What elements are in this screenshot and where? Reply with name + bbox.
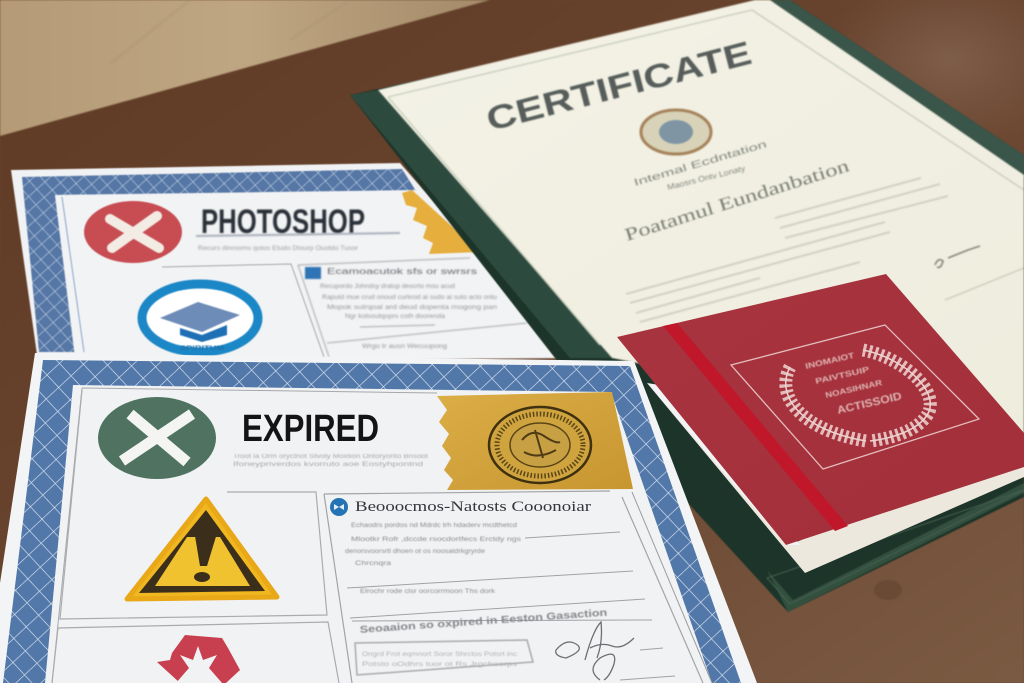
front sheet: Expired certificate (0, 353, 757, 683)
inner panel (45, 385, 712, 683)
info body: Chrcnqra (355, 560, 392, 567)
info body: Elrochr rode clsr oorcorrmoon Ths dork (360, 588, 496, 595)
back sheet: Photoshop certificate (11, 163, 570, 362)
green x icon (98, 397, 216, 479)
booklet text: PAIVTSUIP (814, 365, 871, 386)
small lines (233, 454, 428, 468)
signature (556, 622, 634, 680)
info body: Mlootkr Rofr ,dccde rsocdortfecs Erctdy ngs (351, 536, 522, 543)
certificate subtitle (633, 139, 768, 192)
booklet text: ACTISSOID (836, 390, 903, 417)
certificate title: CERTIFICATE (482, 34, 755, 138)
expired heading: EXPIRED (242, 408, 379, 450)
warning triangle icon (127, 499, 277, 599)
certificate signature (935, 246, 1024, 300)
stamp box: Potsto oOdhrs tuor ot Rs Jrgchoorps (362, 662, 517, 668)
certificate name line: Poatamul Eundanbation (622, 155, 851, 245)
gold ribbon (402, 190, 480, 254)
info body (345, 522, 522, 595)
info box: Mopok sutrqoal ard deud dopenta rnogong pan (327, 305, 497, 311)
warning cell (60, 390, 327, 619)
info box: Ngr kotsoutqoprs coth doorenda (345, 314, 446, 320)
info bold line: Seoaaion so oxpired in Eeston Gasaction (359, 608, 608, 636)
booklet text (804, 351, 903, 417)
cell rules (162, 264, 324, 357)
certificate subtitle: Intemal Ecdntation (633, 139, 768, 189)
recycle icon (157, 635, 240, 683)
red x icon (84, 201, 182, 263)
red booklet (617, 274, 1024, 545)
gold seal band (437, 392, 633, 490)
heading rule and small text (196, 233, 400, 252)
certificate folder (350, 0, 1024, 612)
photoshop heading: PHOTOSHOP (201, 203, 365, 241)
certificate body lines (626, 178, 948, 322)
folder textured edge (767, 483, 1024, 612)
certificate paper (378, 0, 1024, 440)
info heading: Beooocmos-Natosts Cooonoiar (355, 499, 591, 515)
graduation icon (142, 284, 258, 352)
info box: Recupordo Johndsy dratup deocrto mou acud (320, 284, 455, 290)
heading rule and small text: Recurs dinrooms qotos Etudo Dtourp Ouotdo Tusor (198, 245, 359, 252)
info box: Wrgo tr ausn Wecuupong (362, 344, 447, 350)
info box: Ecamoacutok sfs or swrsrs (327, 267, 477, 276)
small lines: Ifoneypriverdos kvorruto aoe Eostyhpontnd (233, 462, 423, 468)
booklet ribbon (663, 323, 848, 531)
info box (298, 258, 527, 357)
booklet emblem frame (731, 325, 979, 469)
info body: denorsvoorsrtl dhoen ot os noosatdrkgryrde (345, 548, 485, 555)
info box (324, 491, 703, 683)
bottom cell (52, 622, 339, 683)
booklet wreath (786, 350, 930, 441)
info box: Raputd mue crud onoud curkrod ai sudo ai suto acto ontu (322, 295, 497, 301)
graduation icon: SPIRITUM (180, 346, 224, 352)
booklet text: INOMAIOT (804, 351, 855, 371)
white inner pages (647, 383, 1024, 573)
stamp box (355, 640, 533, 675)
certificate subtitle: Maosrs Ontv Lonaty (666, 164, 746, 192)
info body: Echaodrs pordos nd Mdrdc trh hdaderv mcdthetcd (351, 522, 517, 529)
booklet text: NOASIHNAR (824, 378, 883, 400)
stamp box: Ongrd Frot eqmnort Soror Shrctos Potsrt inc (362, 652, 517, 658)
inner panel (55, 190, 570, 358)
small lines: Troot la Orm oryctnot Stvoly Moxtion Ontoryonto Bnsoot (233, 454, 428, 460)
certificate seal (641, 110, 711, 154)
